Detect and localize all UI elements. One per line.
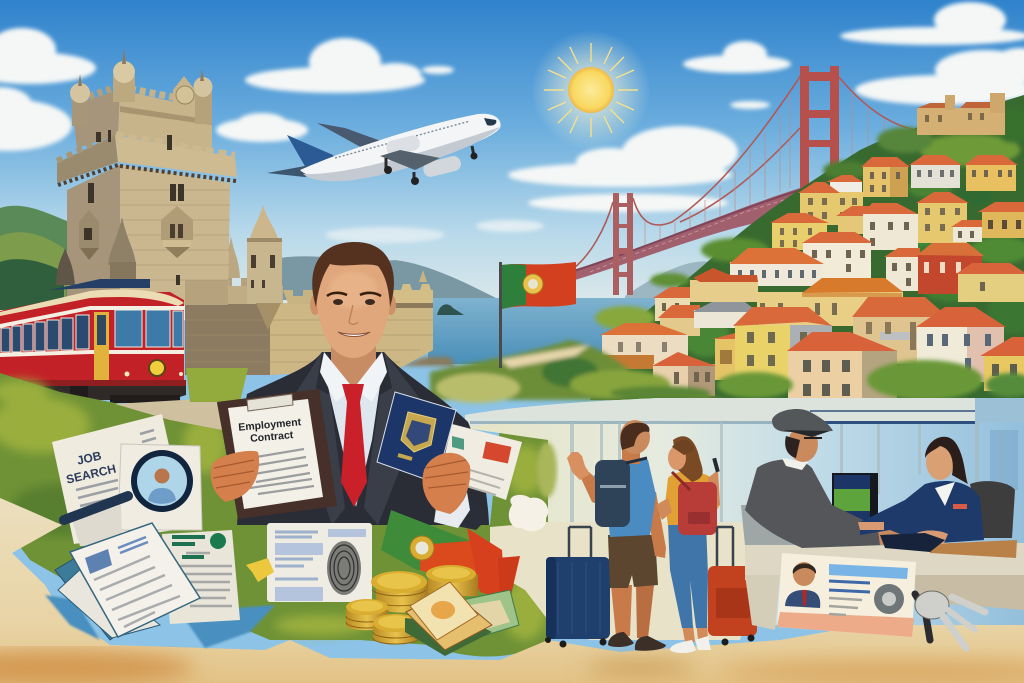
Belem tower and fortress: [56, 48, 433, 375]
sand ground: [0, 498, 1024, 683]
right arm: [644, 492, 666, 558]
collar: [320, 352, 387, 402]
raised arm and hand: [580, 472, 600, 505]
red suitcase: [708, 527, 757, 646]
clipboard with employment contract: Employment: [238, 416, 302, 434]
shirt: [665, 471, 720, 525]
airport terminal wall: [465, 398, 1024, 640]
cables and hangers: [574, 72, 916, 268]
deck: [573, 188, 800, 280]
clouds: [0, 2, 1024, 243]
windows: [1, 310, 183, 352]
identity document with fingerprint: [267, 523, 372, 602]
computer monitor: [832, 473, 878, 525]
ankles: [682, 620, 708, 642]
island: [437, 304, 464, 315]
face: [316, 260, 391, 358]
gallery: [57, 135, 118, 183]
eyes and brows: [333, 299, 343, 305]
magnifying glass handle: [64, 496, 128, 520]
roof equipment: [50, 279, 150, 290]
jeans: [668, 523, 708, 628]
navy suitcase: [545, 527, 610, 648]
shoes: [670, 636, 711, 653]
village houses: [598, 93, 1024, 398]
hair: [312, 242, 394, 307]
house keys: [915, 591, 985, 648]
far tower: [613, 193, 633, 295]
hilltop manor: [917, 93, 1005, 135]
tree clumps: [595, 107, 1024, 357]
passport: [377, 392, 456, 483]
phone: [712, 458, 720, 472]
hand: [878, 522, 908, 545]
shoes: [608, 632, 634, 647]
fortress lower wall: [185, 303, 275, 375]
red backpack: [678, 482, 717, 535]
sentry domes: [108, 217, 136, 265]
turrets: [72, 98, 88, 126]
distant hills: [0, 206, 735, 310]
balcony left: [79, 210, 99, 248]
suit jacket: [237, 352, 489, 525]
smile: [338, 332, 370, 336]
tower windows: [88, 130, 184, 285]
door: [94, 312, 109, 386]
stack of documents: [55, 523, 240, 640]
puff of smoke: [509, 495, 548, 531]
shorts: [608, 535, 658, 588]
neck and head: [622, 448, 640, 464]
left hand: [211, 451, 259, 502]
CV with magnifying glass: [64, 444, 202, 546]
right hand and cuff: [422, 453, 488, 530]
job search document: JOB: [75, 448, 103, 468]
sun: [531, 30, 651, 150]
balcony right: [161, 206, 193, 240]
suspension bridge: [573, 66, 916, 295]
backpack: [595, 460, 630, 527]
near tower: [800, 66, 839, 196]
tram: [0, 279, 186, 403]
flag of Portugal on pole: [499, 262, 576, 368]
shirt: [594, 458, 656, 537]
female traveller: [656, 436, 720, 653]
left grass field: [0, 368, 548, 656]
gold coin stacks: [346, 565, 478, 644]
neck: [331, 340, 376, 392]
cream roof: [0, 289, 184, 316]
folded Portuguese flags: [381, 510, 520, 604]
sky: [0, 0, 1024, 320]
foreground shrubs below village: [400, 340, 1024, 403]
blue water patches: [45, 595, 275, 648]
red tie: [341, 384, 367, 507]
red body: [0, 292, 184, 386]
shirt: [323, 365, 383, 507]
female clerk: [858, 437, 1015, 552]
residence card: [777, 553, 916, 637]
job search document: [52, 414, 175, 544]
job search document: SEARCH: [65, 462, 117, 487]
sea: [428, 298, 668, 364]
clipboard with employment contract: Contract: [250, 429, 294, 445]
upper tier: [72, 90, 120, 148]
counter: [745, 540, 1024, 630]
ticket document behind passport: [440, 424, 522, 500]
main tower: left face: [67, 165, 120, 300]
yellow tag: [246, 558, 274, 582]
airplane: [267, 114, 501, 185]
small domes: [213, 240, 231, 280]
main tower: right face: [120, 165, 230, 305]
legs: [611, 585, 632, 636]
bastion: [247, 240, 282, 304]
male traveller: [567, 420, 666, 651]
clipboard with employment contract: [217, 389, 337, 519]
hair and head: [673, 436, 703, 482]
ears: [310, 295, 320, 315]
man with contract and passport: [237, 242, 489, 525]
hillside greenery: [590, 95, 1024, 400]
customer at the counter: [741, 409, 908, 548]
banknote bundles: [405, 582, 519, 656]
